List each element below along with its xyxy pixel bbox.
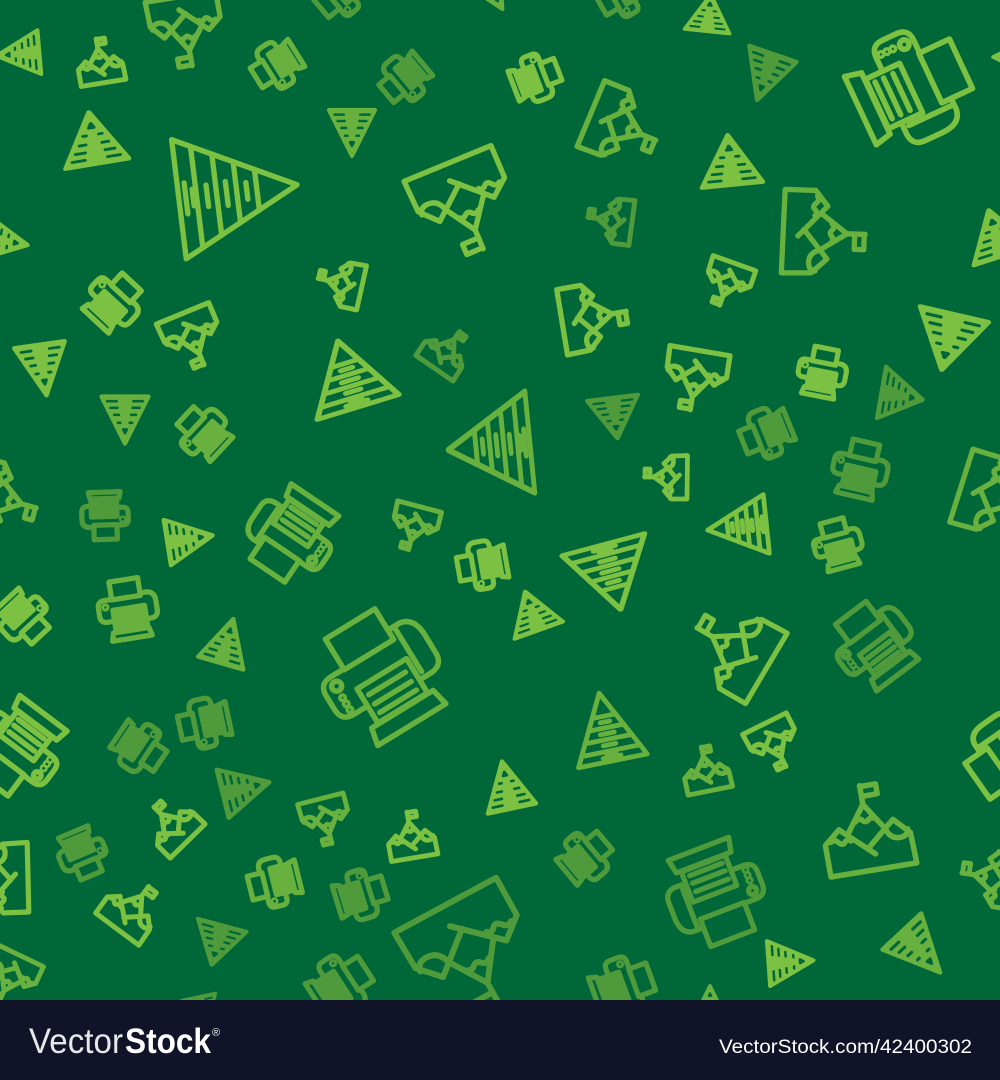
- icon: pyramid: [0, 30, 41, 78]
- icon: mountain: [816, 778, 917, 878]
- icon: printer: [300, 944, 381, 1025]
- icon: pyramid: [198, 612, 256, 670]
- icon: mountain: [679, 742, 733, 796]
- icon: pyramid: [443, 391, 535, 501]
- icon: mountain: [556, 278, 632, 355]
- logo: VectorStock wordmark: [29, 1022, 220, 1061]
- icon: printer: [827, 436, 893, 502]
- icon: large pyramid: [172, 125, 304, 259]
- icon: mountain: [156, 302, 230, 376]
- icon: printer: [106, 713, 174, 782]
- footer bar: [0, 1000, 1000, 1080]
- icon: mountain: [661, 346, 730, 415]
- icon: printer: [734, 401, 798, 465]
- icon: printer: [794, 344, 850, 400]
- icon: printer: [244, 853, 304, 912]
- icon: pyramid: [164, 513, 216, 565]
- icon: printer: [169, 398, 238, 467]
- icon: mountain: [387, 501, 442, 555]
- icon: mountain: [577, 80, 669, 173]
- icon: printer: [0, 583, 58, 652]
- icon: printer: [454, 538, 510, 593]
- icon: printer: [655, 832, 777, 955]
- icon: pyramid: [565, 686, 647, 768]
- icon: mountain: [699, 256, 756, 313]
- icon: mountain: [137, 790, 205, 858]
- icon: large printer: [837, 14, 984, 160]
- icon: printer: [551, 822, 620, 891]
- icon: mountain: [0, 456, 45, 541]
- icon: printer: [52, 823, 113, 885]
- icon: mountain: [416, 319, 478, 381]
- icon: printer: [589, 0, 653, 25]
- icon: mountain: [0, 842, 30, 914]
- icon: mountain: [676, 593, 787, 704]
- icon: pyramid: [102, 396, 148, 444]
- icon: large printer: [301, 594, 461, 755]
- icon: pyramid: [587, 395, 643, 441]
- icon: pyramid: [478, 756, 536, 814]
- icon: printer: [820, 590, 928, 698]
- icon: mountain: [950, 449, 1000, 544]
- icon: printer: [330, 864, 392, 925]
- icon: pyramid: [329, 110, 375, 156]
- icon: pyramid: [993, 37, 1000, 77]
- icon: pyramid: [883, 913, 959, 991]
- icon: large mountain: [394, 877, 551, 1033]
- icon: mountain: [0, 945, 44, 1011]
- icon: mountain: [145, 0, 228, 72]
- icon: mountain: [95, 870, 170, 945]
- icon: printer: [809, 515, 867, 574]
- icon: pyramid: [697, 132, 763, 188]
- icon: printer: [371, 46, 437, 111]
- logo: VectorStock wordmark: ®: [212, 1027, 220, 1039]
- icon: mountain: [298, 792, 355, 849]
- icon: pyramid: [907, 306, 989, 378]
- icon: pyramid: [733, 46, 797, 108]
- icon: printer: [306, 0, 372, 26]
- icon: mountain: [404, 145, 527, 267]
- icon: pyramid: [57, 107, 129, 169]
- logo: VectorStock wordmark: Vector: [29, 1022, 123, 1061]
- icon: mountain: [644, 456, 688, 499]
- icon: pyramid: [501, 583, 563, 639]
- icon: mountain: [585, 195, 635, 245]
- icon: mountain: [781, 189, 867, 276]
- icon: pyramid: [685, 0, 733, 34]
- icon: pyramid: [463, 0, 521, 20]
- icon: pyramid: [297, 329, 399, 419]
- icon: pyramid: [14, 341, 72, 399]
- icon: mountain: [384, 808, 438, 862]
- icon: pyramid: [705, 495, 769, 559]
- icon: printer: [953, 695, 1000, 817]
- icon: pyramid: [0, 214, 32, 268]
- logo: VectorStock wordmark: Stock: [125, 1022, 211, 1061]
- icon: mountain: [958, 845, 1000, 910]
- icon: printer: [95, 575, 161, 643]
- icon: printer: [505, 48, 566, 108]
- icon: pyramid: [959, 201, 1000, 265]
- icon: pyramid: [181, 993, 223, 1035]
- icon: mountain: [74, 35, 126, 87]
- icon: printer: [81, 491, 129, 540]
- icon: printer: [233, 477, 350, 594]
- icon: printer: [76, 264, 151, 339]
- icon: pyramid: [188, 919, 246, 971]
- image id text: VectorStock.com/42400302: [719, 1037, 972, 1058]
- icon: printer: [585, 949, 661, 1024]
- icon: pyramid: [877, 367, 927, 425]
- icon: printer: [244, 33, 309, 98]
- icon: pyramid: [767, 938, 815, 986]
- icon: pyramid: [562, 534, 662, 620]
- icon: mountain: [313, 256, 367, 310]
- icon: printer: [175, 694, 233, 752]
- icon: printer: [0, 687, 78, 809]
- icon: pyramid: [692, 986, 728, 1020]
- icon: pyramid: [217, 758, 275, 818]
- icon: mountain: [743, 712, 808, 777]
